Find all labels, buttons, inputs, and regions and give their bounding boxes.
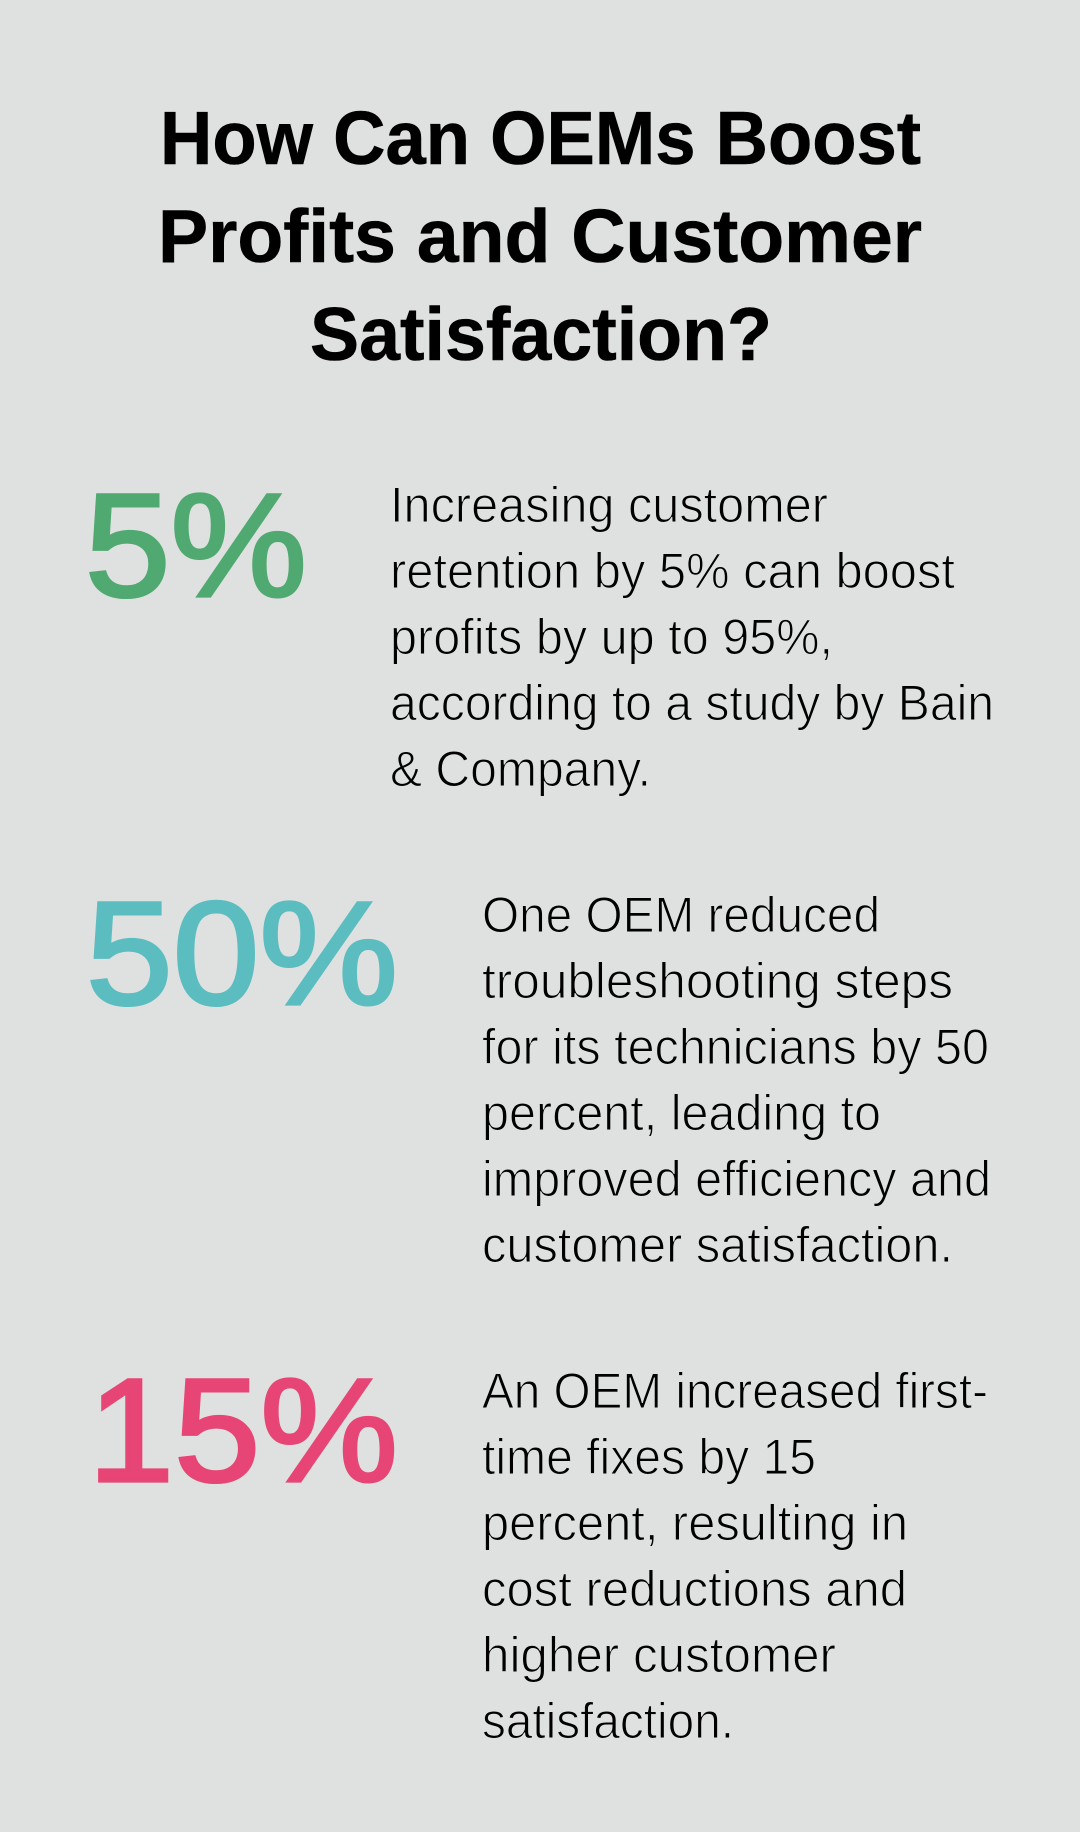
- text block: troubleshooting: customer satisfaction.: [482, 1217, 953, 1273]
- text block: customer retention: retention by 5% can boost: [390, 543, 955, 599]
- text block: first-time fixes: cost reductions and: [482, 1561, 907, 1617]
- text block: customer retention: Increasing customer: [390, 477, 828, 533]
- title: Profits and Customer: [158, 194, 922, 278]
- text block: first-time fixes: [482, 1363, 988, 1749]
- text block: troubleshooting: [482, 887, 991, 1273]
- text block: troubleshooting: troubleshooting steps: [482, 953, 953, 1009]
- text block: first-time fixes: percent, resulting in: [482, 1495, 908, 1551]
- text block: first-time fixes: time fixes by 15: [482, 1429, 816, 1485]
- title: How Can OEMs Boost: [160, 96, 921, 180]
- text block: troubleshooting: percent, leading to: [482, 1085, 881, 1141]
- panel: 50% statistic: [86, 872, 991, 1273]
- text block: customer retention: & Company.: [390, 741, 651, 797]
- text block: customer retention: [390, 477, 994, 797]
- text block: troubleshooting: improved efficiency and: [482, 1151, 991, 1207]
- text block: first-time fixes: satisfaction.: [482, 1693, 734, 1749]
- stat number: 15%: 15%: [88, 1349, 398, 1513]
- stat number: 5%: 5%: [85, 464, 307, 628]
- text block: troubleshooting: One OEM reduced: [482, 887, 880, 943]
- text block: troubleshooting: for its technicians by 50: [482, 1019, 989, 1075]
- text block: customer retention: profits by up to 95%,: [390, 609, 833, 665]
- text block: first-time fixes: higher customer: [482, 1627, 836, 1683]
- panel: 15% statistic: [88, 1349, 988, 1749]
- text block: first-time fixes: An OEM increased first-: [482, 1363, 988, 1419]
- text block: customer retention: according to a study by Bain: [390, 675, 994, 731]
- panel: 5% statistic: [85, 464, 994, 797]
- title: Satisfaction?: [310, 292, 772, 376]
- title: [158, 96, 922, 376]
- stat number: 50%: 50%: [86, 872, 398, 1036]
